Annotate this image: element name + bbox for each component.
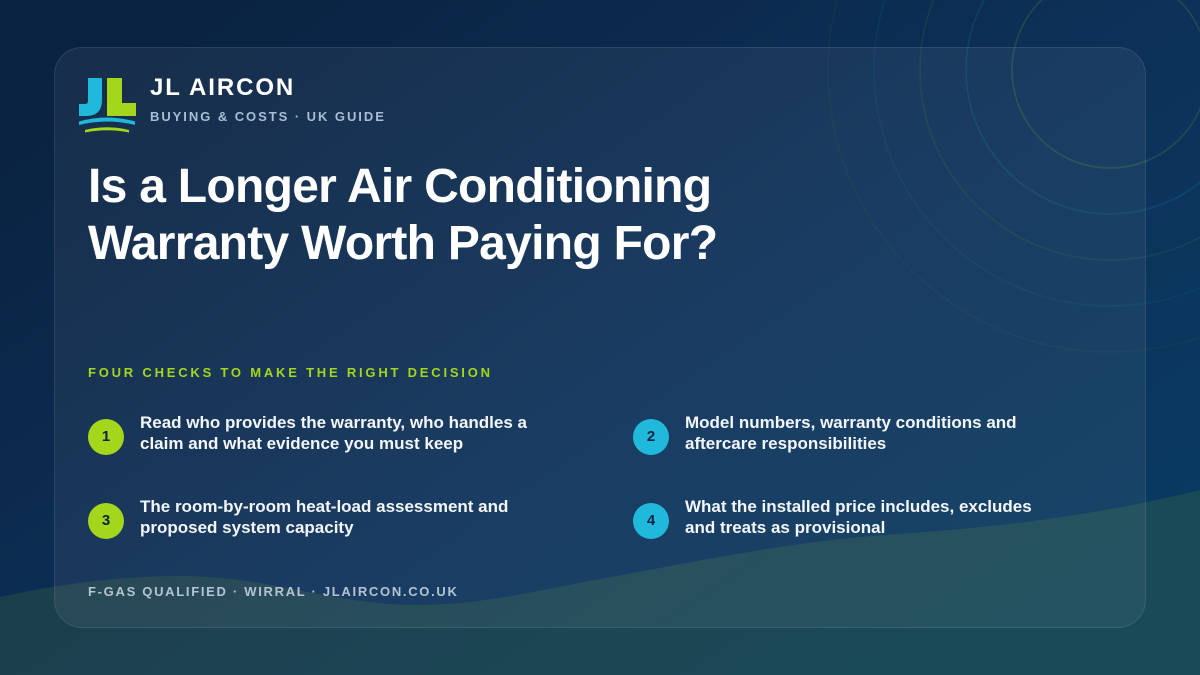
check 2: aftercare responsibilities <box>685 434 886 453</box>
check 4: 4 <box>647 512 655 529</box>
check 3: 3 <box>102 512 110 529</box>
check 2 <box>633 413 1017 455</box>
check 3 <box>88 497 508 539</box>
brand subtitle: BUYING & COSTS · UK GUIDE <box>150 109 386 124</box>
brand name: JL AIRCON <box>150 74 295 101</box>
check 4 <box>633 497 1032 539</box>
footer: F-GAS QUALIFIED · WIRRAL · JLAIRCON.CO.UK <box>88 584 459 599</box>
check 4: and treats as provisional <box>685 518 885 537</box>
check 1: Read who provides the warranty, who handles a <box>140 413 527 432</box>
check 1: 1 <box>102 428 110 445</box>
icon: JL logo <box>79 78 136 132</box>
check 2: Model numbers, warranty conditions and <box>685 413 1017 432</box>
section heading: FOUR CHECKS TO MAKE THE RIGHT DECISION <box>88 365 493 380</box>
check 2: 2 <box>647 428 655 445</box>
check 3: proposed system capacity <box>140 518 354 537</box>
check 3: The room-by-room heat-load assessment and <box>140 497 508 516</box>
title: Warranty Worth Paying For? <box>88 217 717 270</box>
title <box>88 160 717 270</box>
check 4: What the installed price includes, excludes <box>685 497 1032 516</box>
check 1: claim and what evidence you must keep <box>140 434 463 453</box>
check 1 <box>88 413 528 455</box>
panel: main card <box>54 47 1146 628</box>
title: Is a Longer Air Conditioning <box>88 160 711 213</box>
